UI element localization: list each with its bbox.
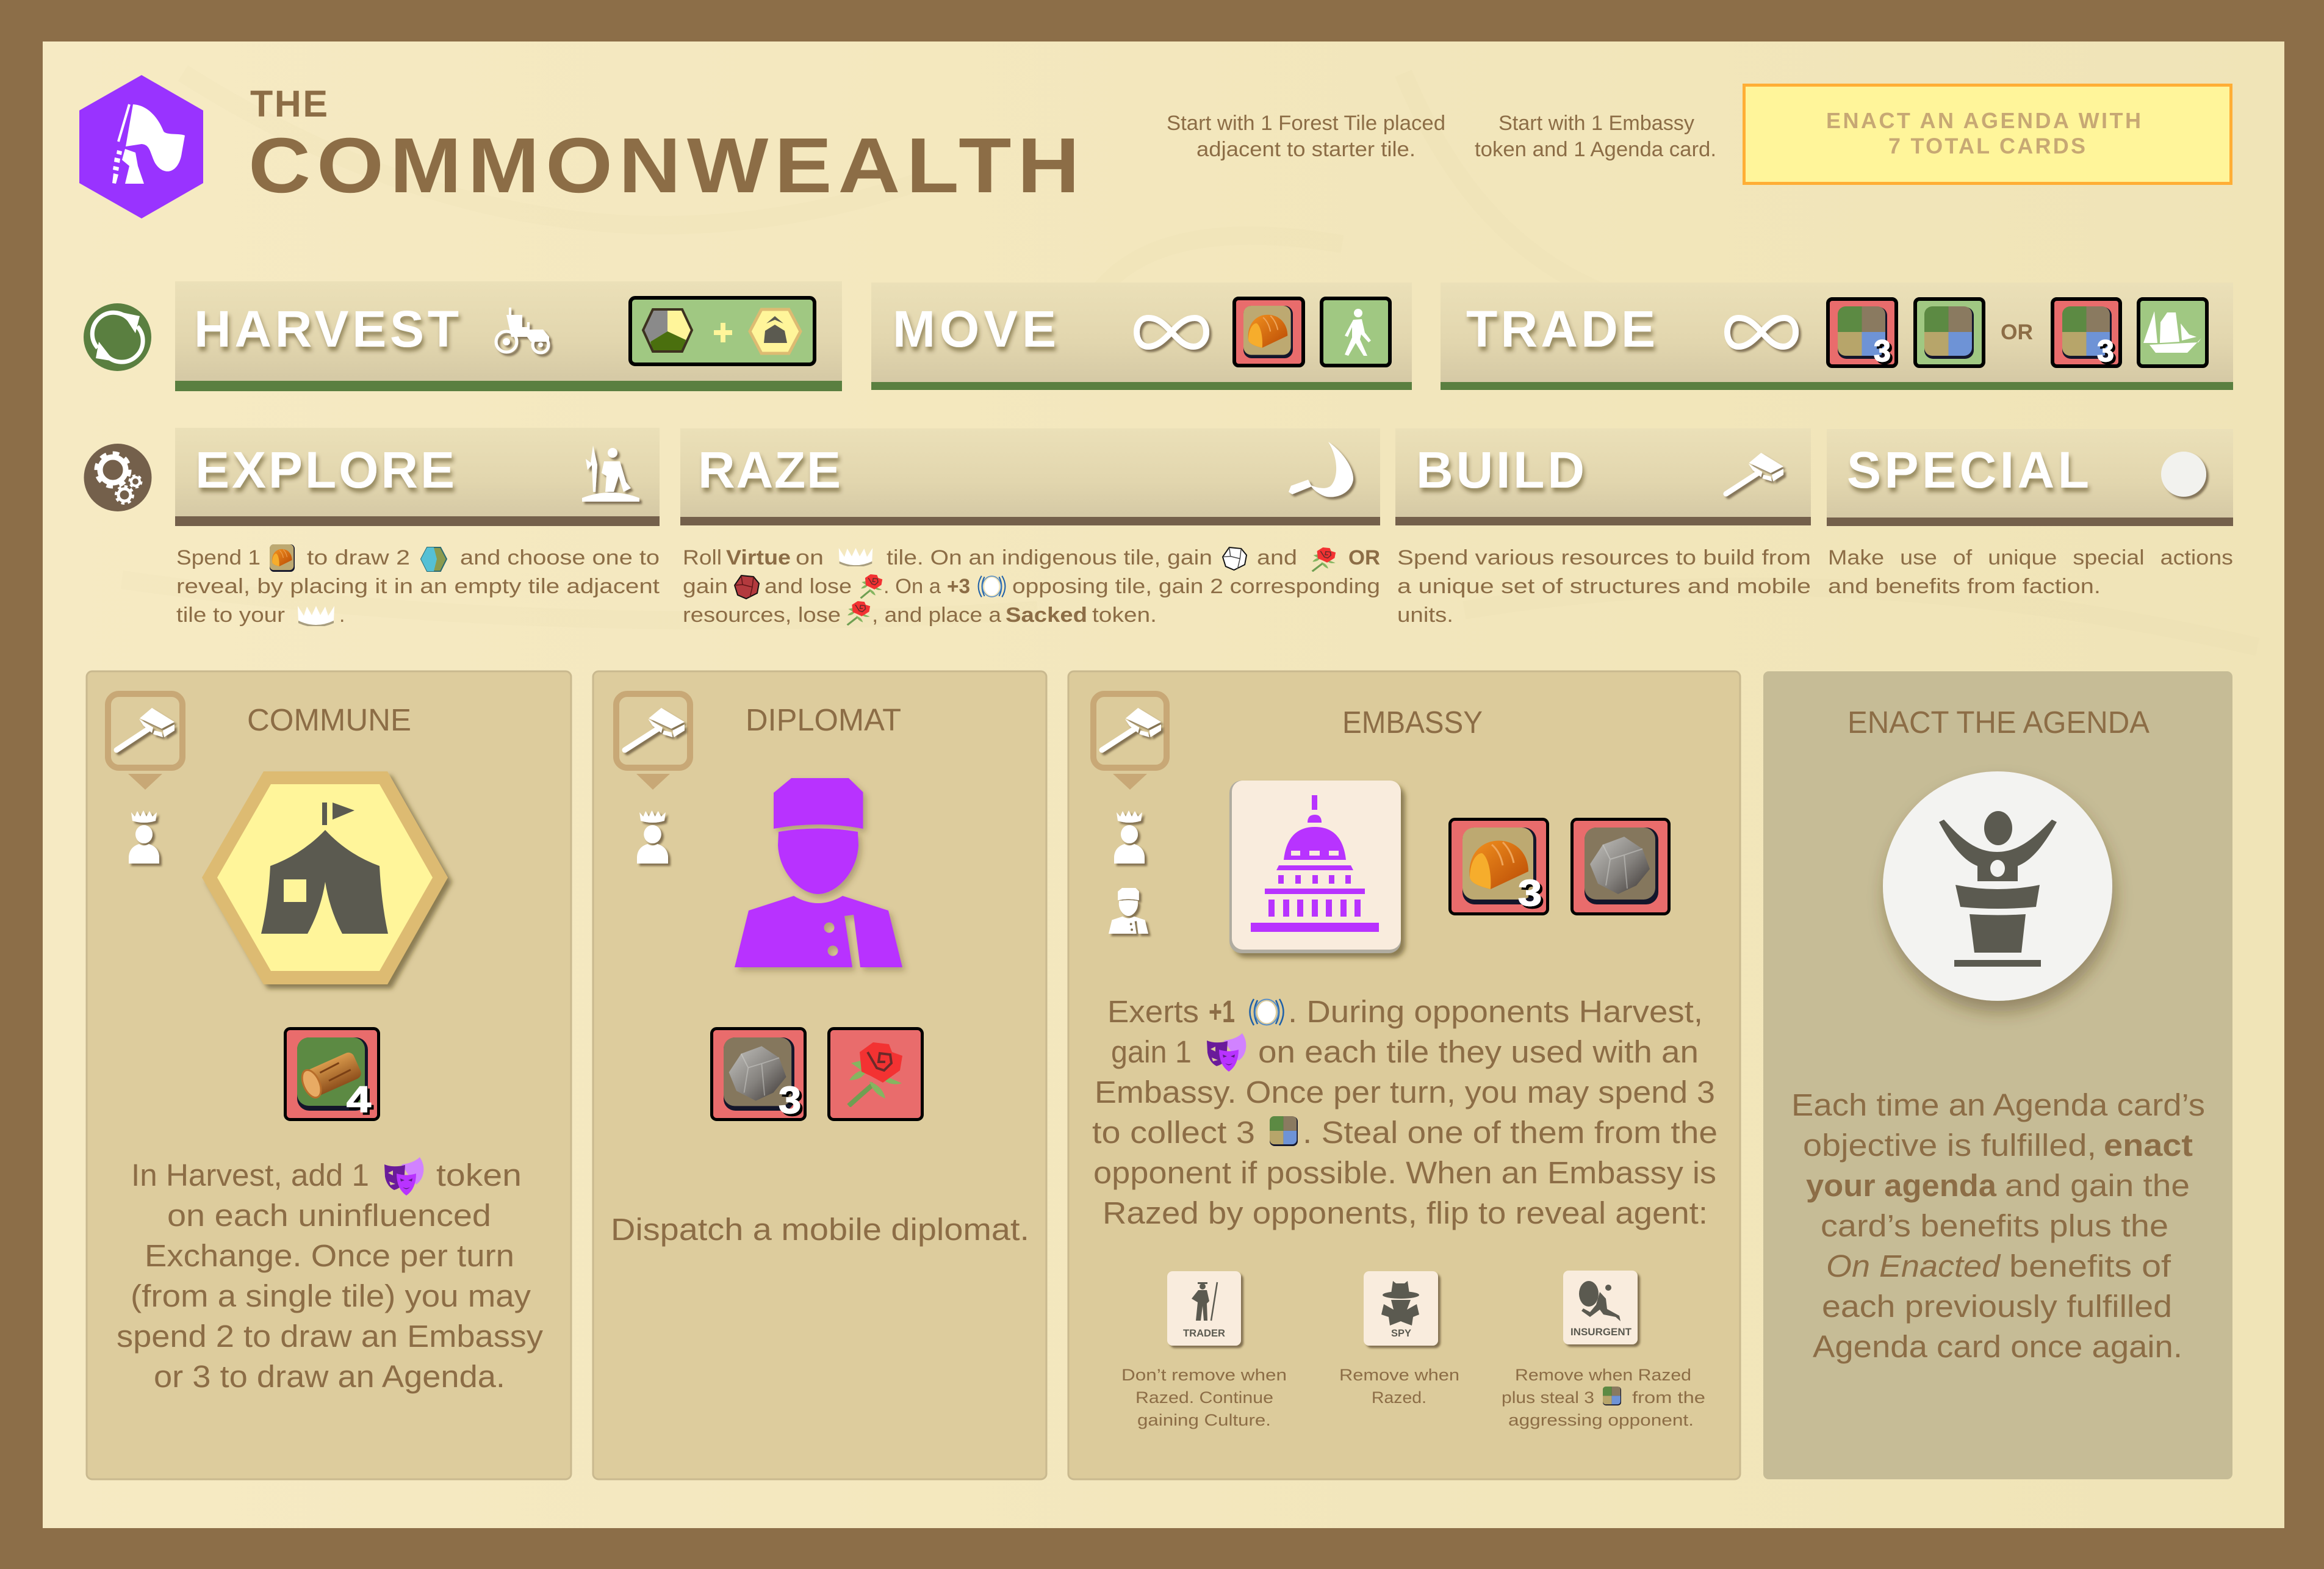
setup note: embassy token: token and 1 Agenda card. [1475, 138, 1716, 161]
panel: move [871, 283, 1412, 390]
text: enact description: On Enacted [1826, 1249, 2001, 1283]
icon: crown [839, 548, 872, 567]
icon: any resource token [1603, 1387, 1621, 1405]
text: raze description: , and place a [872, 604, 1001, 627]
panel: move: MOVE [893, 300, 1056, 358]
text: spy effect [1339, 1366, 1459, 1407]
text: trader effect: gaining Culture. [1137, 1411, 1271, 1429]
heading: DIPLOMAT [746, 702, 901, 737]
text: embassy description: . During opponents Harvest, [1288, 994, 1703, 1029]
icon: rose [847, 601, 870, 625]
card: trader: TRADER [1183, 1327, 1225, 1339]
icon: teal tile [421, 547, 447, 571]
icon: three any resources cost [1828, 299, 1896, 368]
icon: ship [2139, 299, 2207, 366]
icon: wood cost [286, 1029, 378, 1120]
callout: win condition: 7 TOTAL CARDS [1888, 133, 2085, 159]
text: explore description: Spend 1 [176, 546, 261, 569]
panel: raze: RAZE [698, 441, 841, 499]
icon: three any resources: 3 [2097, 334, 2114, 368]
icon: white gem [1223, 547, 1247, 570]
panel: enact the agenda [1763, 671, 2232, 1479]
icon: commune hexagon [202, 771, 448, 984]
text: raze description [683, 546, 1380, 627]
text: raze description: +3 [947, 575, 970, 598]
text: raze description: tile. On an indigenous tile, gain [887, 546, 1212, 569]
icon: any resource token [1270, 1116, 1298, 1146]
text: embassy description: Exerts [1107, 994, 1199, 1029]
panel: embassy [1068, 671, 1740, 1479]
text: embassy description: Razed by opponents, flip to reveal agent: [1103, 1196, 1708, 1230]
text: embassy description: on each tile they used with an [1258, 1034, 1699, 1069]
text: enact description: benefits of [2009, 1249, 2171, 1283]
panel: harvest [175, 281, 842, 391]
panel: harvest: HARVEST [194, 300, 459, 358]
text: explore description: and choose one to [460, 546, 660, 569]
text: enact description [1791, 1087, 2205, 1364]
setup note: forest tile: Start with 1 Forest Tile placed [1167, 112, 1445, 135]
panel: build: BUILD [1416, 441, 1585, 499]
text: enact description: card’s benefits plus the [1821, 1208, 2168, 1243]
heading: ENACT THE AGENDA [1847, 705, 2150, 740]
text: enact description: Agenda card once again. [1813, 1329, 2182, 1364]
text: raze description: OR [1348, 546, 1380, 569]
icon: culture masks [384, 1157, 423, 1196]
icon: culture masks [1207, 1033, 1246, 1072]
text: enact description: enact [2104, 1128, 2193, 1163]
icon: food cost [1234, 298, 1303, 366]
icon: crown [298, 606, 334, 627]
text: raze description: . On a [883, 575, 941, 598]
panel: commune [87, 671, 571, 1479]
callout: win condition: ENACT AN AGENDA WITH [1826, 108, 2141, 133]
text: raze description: resources, lose [683, 604, 841, 627]
icon: food cost [1450, 819, 1547, 914]
title: THE [250, 83, 328, 124]
icon: food token [270, 544, 295, 572]
icon: infinity [1727, 318, 1796, 347]
text: raze description: token. [1092, 604, 1157, 627]
panel: trade: TRADE [1466, 300, 1655, 358]
icon group: tile plus commune [630, 298, 815, 364]
text: trader effect [1121, 1366, 1287, 1429]
icon: wood cost: 4 [347, 1079, 372, 1120]
icon: influence waves [979, 576, 1005, 597]
text: raze description: Roll [683, 546, 722, 569]
text: commune description [117, 1157, 544, 1394]
text: commune description: Exchange. Once per turn [145, 1238, 514, 1273]
icon: harvest cycle [84, 303, 151, 371]
icon: crowned person [129, 810, 159, 864]
text: special description: and benefits from faction. [1828, 575, 2101, 598]
icon: scythe [1289, 442, 1353, 497]
text: raze description: and lose [764, 575, 852, 598]
icon: red gem [735, 575, 759, 599]
text: enact description: objective is fulfilled, [1803, 1128, 2096, 1163]
icon: diplomat figure [735, 778, 902, 967]
icon: rose cost [829, 1029, 923, 1119]
text: embassy description: +1 [1209, 994, 1235, 1029]
icon: infinity [1137, 318, 1206, 347]
icon: any resource gain [1915, 299, 1984, 366]
panel: raze [680, 428, 1380, 525]
text: commune description: spend 2 to draw an Embassy [117, 1319, 544, 1354]
card: insurgent [1563, 1271, 1638, 1344]
text: diplomat description: Dispatch a mobile diplomat. [611, 1212, 1029, 1247]
text: raze description: on [796, 546, 824, 569]
card: insurgent: INSURGENT [1570, 1326, 1632, 1338]
icon: build badge [108, 694, 182, 790]
text: enact description: your agenda [1806, 1168, 1997, 1203]
text: trader effect: Don’t remove when [1121, 1366, 1287, 1384]
title [248, 83, 1085, 209]
icon: food cost: 3 [1518, 873, 1542, 914]
text: special description [1828, 546, 2233, 598]
panel: special [1827, 429, 2233, 526]
text: enact description: and gain the [2005, 1168, 2190, 1203]
heading: EMBASSY [1342, 705, 1483, 740]
text: build description: Spend various resources to build from [1397, 546, 1811, 569]
text: raze description: opposing tile, gain 2 corresponding [1012, 575, 1380, 598]
card: trader [1167, 1271, 1241, 1346]
icon: hammer [1726, 453, 1783, 494]
text: raze description: Sacked [1006, 604, 1087, 627]
text: embassy description: to collect 3 [1092, 1115, 1255, 1150]
icon: crowned person [637, 810, 668, 864]
icon: stone cost [1572, 819, 1669, 914]
text: enact description: Each time an Agenda card’s [1791, 1087, 2205, 1122]
text: explore description: reveal, by placing it in an empty tile adjacent [176, 575, 660, 598]
icon: white circle [2161, 452, 2206, 497]
icon: explorer [582, 445, 639, 502]
icon: diplomat person [1109, 888, 1148, 934]
setup note: forest tile [1167, 112, 1445, 161]
text: commune description: token [436, 1158, 522, 1192]
logo: purple hexagon with flag [79, 75, 203, 218]
text: insurgent effect: from the [1632, 1388, 1705, 1407]
card: spy: SPY [1391, 1327, 1412, 1339]
text: embassy description [1092, 994, 1718, 1230]
text: trader effect: Razed. Continue [1135, 1388, 1273, 1407]
icon: stone cost: 3 [779, 1080, 801, 1122]
text: raze description: gain [683, 575, 728, 598]
icon: rose [861, 574, 882, 598]
icon: build badge [1093, 694, 1167, 790]
icon: crowned person [1114, 810, 1145, 864]
icon: influence waves [1250, 999, 1284, 1025]
text: insurgent effect [1502, 1366, 1705, 1429]
icon: rose [1312, 547, 1336, 571]
text: special description: Make use of unique special actions [1828, 546, 2233, 569]
text: commune description: or 3 to draw an Agenda. [154, 1359, 505, 1394]
callout: win condition [1744, 85, 2231, 183]
text: embassy description: . Steal one of them from the [1303, 1115, 1718, 1150]
panel: build [1395, 428, 1811, 525]
card: spy [1364, 1271, 1438, 1346]
icon: tractor [496, 308, 549, 353]
panel: trade [1441, 283, 2233, 390]
panel: special: SPECIAL [1847, 441, 2089, 499]
text: build description: a unique set of structures and mobile [1397, 575, 1811, 598]
text: embassy description: opponent if possible. When an Embassy is [1093, 1155, 1716, 1190]
text: commune description: (from a single tile) you may [131, 1279, 531, 1313]
setup note: embassy token [1475, 112, 1716, 161]
panel: explore: EXPLORE [195, 441, 455, 499]
setup note: embassy token: Start with 1 Embassy [1498, 112, 1694, 135]
text: embassy description: gain 1 [1111, 1034, 1192, 1069]
text: explore description: to draw 2 [307, 546, 410, 569]
text: insurgent effect: Remove when Razed [1515, 1366, 1691, 1384]
text: build description [1397, 546, 1811, 627]
icon: three any resources [2052, 299, 2120, 368]
text: explore description: tile to your [176, 604, 285, 627]
icon: build badge [616, 694, 690, 790]
heading: COMMUNE [247, 702, 411, 737]
text: insurgent effect: plus steal 3 [1502, 1388, 1594, 1407]
text: build description: units. [1397, 604, 1453, 627]
icon: walking unit [1322, 298, 1390, 366]
icon: actions gears [84, 444, 151, 511]
text: raze description: Virtue [726, 546, 791, 569]
icon: speaker at lectern [1883, 771, 2112, 1001]
text: raze description: and [1257, 546, 1297, 569]
text: spy effect: Remove when [1339, 1366, 1459, 1384]
text: embassy description: Embassy. Once per turn, you may spend 3 [1095, 1075, 1715, 1109]
setup note: forest tile: adjacent to starter tile. [1196, 138, 1416, 161]
text: enact description: each previously fulfilled [1822, 1289, 2172, 1324]
icon: stone cost [711, 1029, 805, 1122]
text: commune description: In Harvest, add 1 [131, 1158, 369, 1192]
panel: diplomat [593, 671, 1046, 1479]
icon: capitol card [1229, 781, 1401, 953]
text: explore description [176, 544, 660, 627]
text: commune description: on each uninfluenced [167, 1198, 491, 1233]
label: or: OR [2001, 320, 2033, 344]
icon: three any resources cost: 3 [1874, 334, 1891, 368]
text: spy effect: Razed. [1372, 1388, 1426, 1407]
text: explore description: . [339, 604, 345, 627]
title: COMMONWEALTH [248, 121, 1085, 209]
text: insurgent effect: aggressing opponent. [1508, 1411, 1694, 1429]
panel: explore [175, 428, 660, 526]
